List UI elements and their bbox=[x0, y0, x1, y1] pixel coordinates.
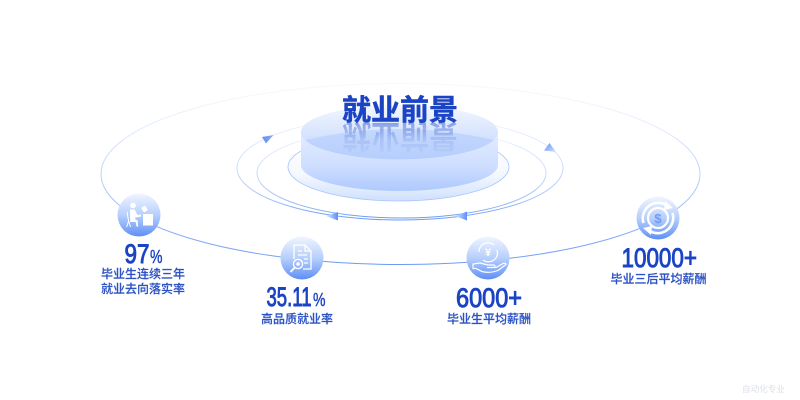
icon: dollar coin with cycle arrows: $ bbox=[654, 211, 662, 226]
cylinder bbox=[301, 105, 498, 191]
percent sign: % bbox=[150, 247, 162, 267]
label: 毕业生平均薪酬 bbox=[447, 311, 531, 326]
label: 毕业生连续三年 bbox=[101, 266, 185, 281]
title: 就业前景 bbox=[342, 94, 458, 127]
stat: 35.11 bbox=[266, 282, 312, 312]
item: 10000+ bbox=[610, 196, 707, 286]
title reflection: 就业前景 bbox=[342, 117, 458, 154]
arrow: bottom right bbox=[455, 212, 467, 220]
item: 6000+ bbox=[447, 236, 531, 326]
icon: document with magnifier bbox=[280, 236, 324, 280]
stat: 6000+ bbox=[456, 283, 522, 313]
arrow: upper left bbox=[262, 135, 274, 144]
stat: 97 bbox=[124, 239, 150, 269]
orbit: outer ellipse bbox=[101, 84, 700, 264]
label: 高品质就业率 bbox=[261, 311, 333, 326]
stat: 10000+ bbox=[622, 243, 697, 273]
arrow: upper right bbox=[544, 143, 556, 152]
icon: person at desk bbox=[118, 194, 160, 236]
orbit: large middle ring bbox=[237, 116, 563, 220]
orbit: small middle ring bbox=[257, 128, 546, 218]
label: 毕业三后平均薪酬 bbox=[610, 271, 707, 286]
watermark: 自动化专业 bbox=[742, 383, 785, 394]
item: 97% bbox=[101, 194, 185, 296]
label line 2: 就业去向落实率 bbox=[101, 281, 185, 296]
icon: hand with yen coin: ¥ bbox=[485, 247, 492, 259]
item: 35.11% bbox=[261, 236, 333, 326]
disc base bbox=[288, 133, 509, 201]
percent sign: % bbox=[313, 290, 326, 310]
arrow: bottom left bbox=[326, 212, 338, 220]
